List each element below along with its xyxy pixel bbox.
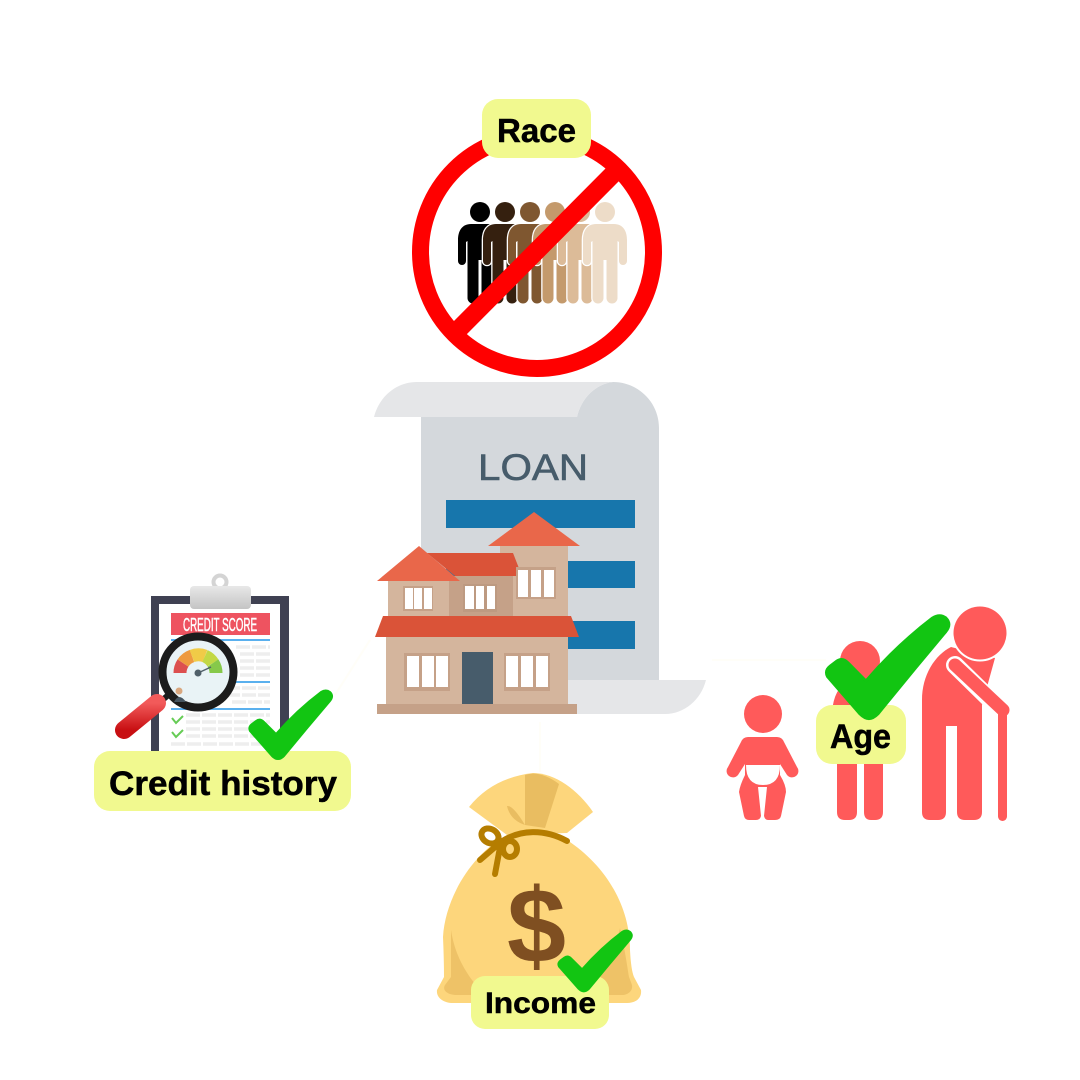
icon: magnifying glass with gauge: [124, 636, 234, 730]
icon: green check: [558, 930, 632, 991]
panel: age: [727, 604, 1008, 821]
label: Income: Income: [485, 987, 596, 1020]
icon: green check: [826, 616, 949, 718]
panel: loan document and house: [374, 382, 706, 714]
icon: six people of different skin tones: [458, 202, 627, 304]
label: Race: [482, 99, 591, 158]
icon: green check: [249, 690, 332, 759]
icon: house: [375, 512, 580, 714]
label: Income: [471, 976, 609, 1029]
icon: baby, adult and elderly figures: [727, 604, 1008, 821]
icon: loan document: [374, 382, 706, 714]
icon: money bag: [437, 773, 641, 1003]
panel: race prohibited: [420, 99, 654, 368]
label: Credit history: [94, 751, 351, 811]
icon: adult: [832, 641, 888, 820]
icon: prohibition sign: [420, 136, 654, 368]
faint connector lines: [335, 640, 826, 772]
text: CREDIT SCORE: CREDIT SCORE: [183, 615, 257, 635]
text: dollar sign: $: [507, 867, 566, 985]
label: Age: [816, 705, 906, 764]
label: Age: Age: [830, 718, 891, 756]
panel: credit history: [94, 576, 351, 811]
label: Credit history: Credit history: [109, 765, 337, 803]
label: Race: Race: [497, 112, 576, 149]
text: LOAN: LOAN: [478, 447, 588, 488]
icon: elderly person with cane: [922, 604, 1008, 821]
panel: income: [437, 773, 641, 1029]
icon: credit score clipboard: [151, 576, 289, 756]
icon: rope tie: [479, 825, 567, 874]
icon: baby: [727, 695, 798, 820]
